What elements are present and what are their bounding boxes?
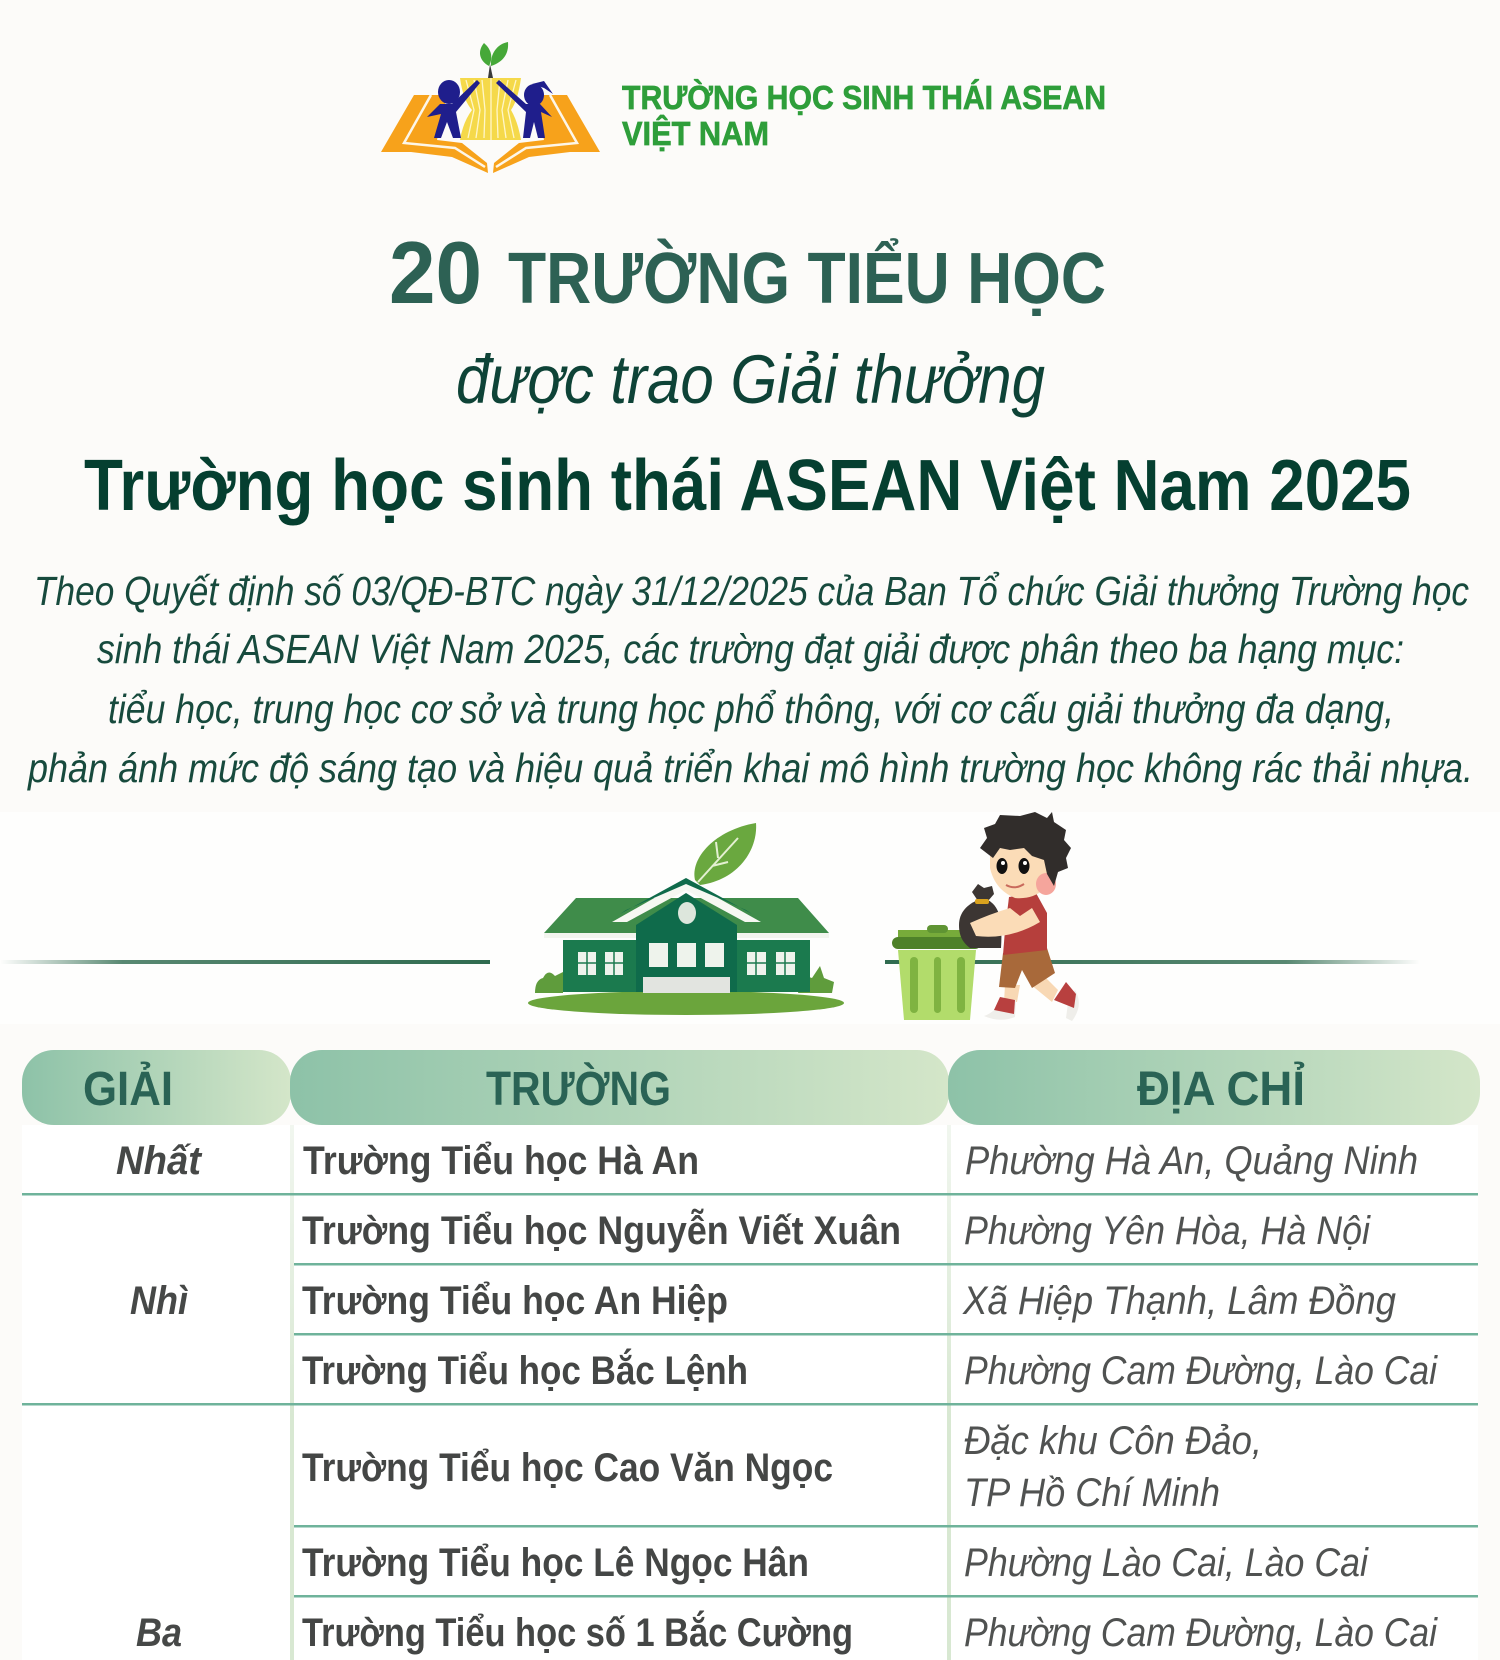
title line 1: TRƯỜNG TIỂU HỌC bbox=[508, 238, 1106, 319]
table header: ĐỊA CHỈ: ĐỊA CHỈ bbox=[1137, 1061, 1305, 1116]
row 5: Đặc khu Côn Đảo, bbox=[964, 1419, 1262, 1463]
icon: green school with leaf bbox=[528, 823, 844, 1015]
title line 1: 20 bbox=[389, 223, 482, 322]
logo icon: book, wheat, children and sprout bbox=[381, 42, 600, 173]
row 2 bbox=[302, 1207, 1371, 1253]
row 6: Trường Tiểu học Lê Ngọc Hân bbox=[302, 1541, 809, 1585]
row 7: Trường Tiểu học số 1 Bắc Cường bbox=[302, 1609, 853, 1655]
intro paragraph bbox=[26, 568, 1473, 791]
row 4: Phường Cam Đường, Lào Cai bbox=[964, 1349, 1438, 1393]
title line 2: được trao Giải thưởng bbox=[456, 341, 1045, 418]
table header: TRƯỜNG: TRƯỜNG bbox=[486, 1061, 671, 1116]
row 1: Phường Hà An, Quảng Ninh bbox=[965, 1139, 1418, 1183]
prize label: Ba: Ba bbox=[136, 1611, 182, 1655]
logo text: TRƯỜNG HỌC SINH THÁI ASEAN bbox=[622, 79, 1106, 116]
table header: GIẢI bbox=[22, 1050, 291, 1125]
row 2: Trường Tiểu học Nguyễn Viết Xuân bbox=[302, 1207, 901, 1253]
title line 1 bbox=[389, 223, 1106, 322]
row 1 bbox=[303, 1139, 1418, 1183]
row 5 bbox=[302, 1419, 1262, 1515]
row 3: Xã Hiệp Thạnh, Lâm Đồng bbox=[962, 1279, 1396, 1323]
divider line right bbox=[885, 960, 1420, 964]
row 7 bbox=[302, 1609, 1438, 1655]
logo text: VIỆT NAM bbox=[622, 115, 769, 152]
logo bbox=[381, 42, 1106, 173]
row 4 bbox=[302, 1347, 1438, 1393]
table header: ĐỊA CHỈ bbox=[948, 1050, 1480, 1125]
prize label: Nhì: Nhì bbox=[130, 1279, 188, 1323]
icon: trash bin bbox=[892, 925, 981, 1020]
logo text bbox=[622, 79, 1106, 152]
icon: boy carrying trash bag bbox=[959, 812, 1079, 1021]
illustration band bbox=[0, 812, 1500, 1024]
table header: GIẢI: GIẢI bbox=[83, 1061, 173, 1116]
row 7: Phường Cam Đường, Lào Cai bbox=[964, 1611, 1438, 1655]
row 4: Trường Tiểu học Bắc Lệnh bbox=[302, 1347, 748, 1393]
table header: TRƯỜNG bbox=[290, 1050, 949, 1125]
row 6 bbox=[302, 1541, 1369, 1585]
divider line left bbox=[0, 960, 490, 964]
row 3 bbox=[302, 1279, 1396, 1323]
table bbox=[22, 1050, 1480, 1660]
row 5: Trường Tiểu học Cao Văn Ngọc bbox=[302, 1446, 833, 1490]
title bbox=[84, 223, 1411, 526]
row 6: Phường Lào Cai, Lào Cai bbox=[964, 1541, 1369, 1585]
row 3: Trường Tiểu học An Hiệp bbox=[302, 1279, 728, 1323]
prize label: Nhất: Nhất bbox=[116, 1139, 203, 1183]
row 2: Phường Yên Hòa, Hà Nội bbox=[964, 1209, 1371, 1253]
row 5: TP Hồ Chí Minh bbox=[964, 1471, 1220, 1515]
row 1: Trường Tiểu học Hà An bbox=[303, 1139, 699, 1183]
